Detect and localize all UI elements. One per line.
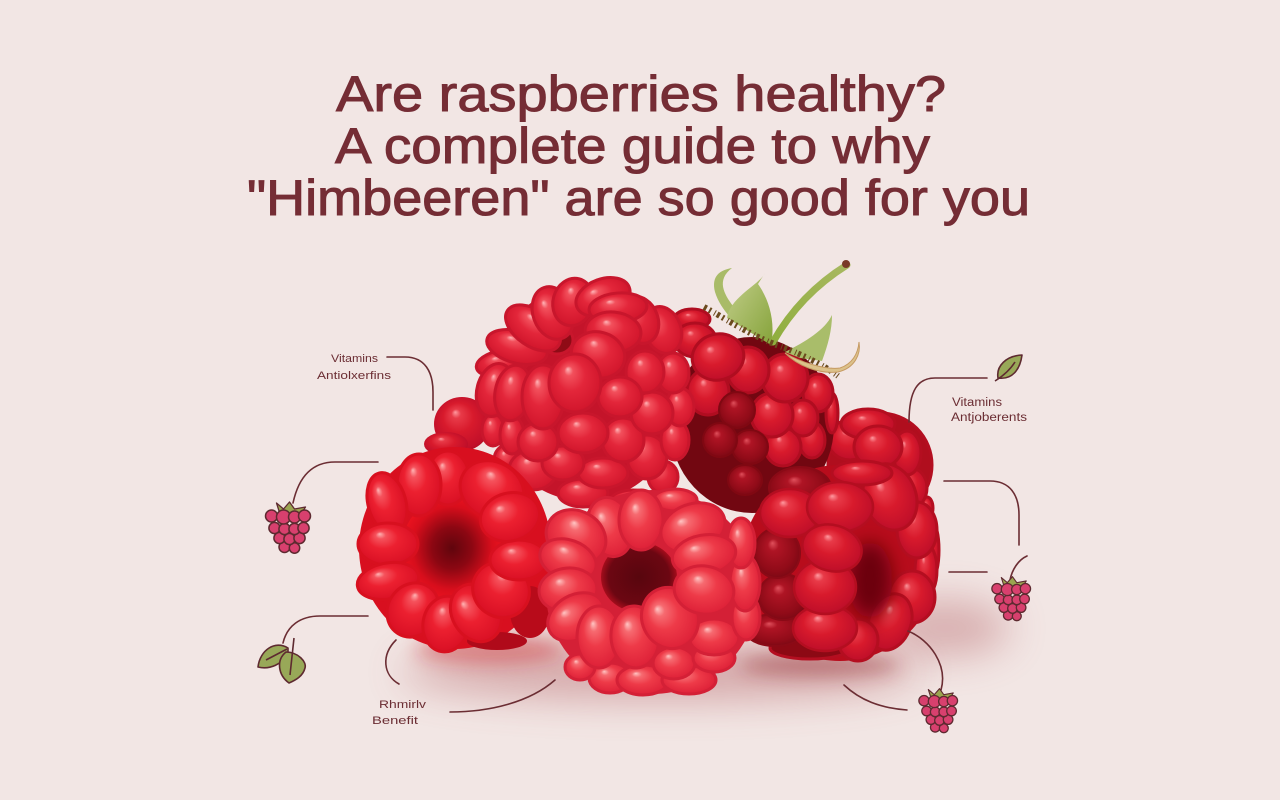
raspberry: top right with dark underside <box>670 309 838 513</box>
title: A complete guide to why <box>335 118 930 174</box>
stem and sepals <box>704 260 859 376</box>
icon: raspberry bottom <box>919 689 958 733</box>
ring drupelets <box>354 449 548 656</box>
hole <box>402 496 502 600</box>
outer drupelets <box>770 456 939 661</box>
curled sepal <box>785 342 859 372</box>
label: right <box>951 397 1027 424</box>
right sepal <box>785 315 832 361</box>
raspberry: left <box>354 447 551 656</box>
stem <box>773 265 847 342</box>
narrow sepal <box>714 268 733 316</box>
label: bottom: Rhmirlv <box>379 699 427 711</box>
lower and outer drupelets <box>565 489 760 695</box>
label: bottom <box>372 699 427 727</box>
calyx <box>704 307 838 376</box>
big sepal <box>727 273 773 345</box>
ground shadow <box>400 600 1010 700</box>
title: Are raspberries healthy? <box>336 66 946 122</box>
drupelets shaded <box>703 392 768 495</box>
icon: leaf pair <box>258 638 305 683</box>
label: right: Vitamins <box>952 397 1002 409</box>
raspberry: front <box>534 489 760 695</box>
raspberry: right <box>742 456 939 661</box>
drupelets lit <box>674 309 838 466</box>
shaded drupelets <box>745 467 831 646</box>
label: top left: Antiolxerfins <box>317 370 392 382</box>
label: top left: Vitamins <box>331 353 379 365</box>
icon: single leaf <box>995 355 1022 381</box>
connector lines <box>283 357 1027 712</box>
title: "Himbeeren" are so good for you <box>247 170 1030 226</box>
raspberry: back right <box>828 409 933 519</box>
ring drupelets <box>534 490 739 670</box>
raspberry: back left <box>424 397 490 456</box>
label: right: Antjoberents <box>951 412 1027 424</box>
label: top left <box>317 353 392 382</box>
icon: raspberry right <box>992 577 1031 621</box>
dark core <box>848 542 892 618</box>
hole <box>601 542 677 612</box>
title <box>247 66 1030 226</box>
raspberry: top centre <box>471 271 694 510</box>
label: bottom: Benefit <box>372 715 418 727</box>
front drupelets <box>760 482 873 651</box>
icon: raspberry left <box>266 502 310 553</box>
